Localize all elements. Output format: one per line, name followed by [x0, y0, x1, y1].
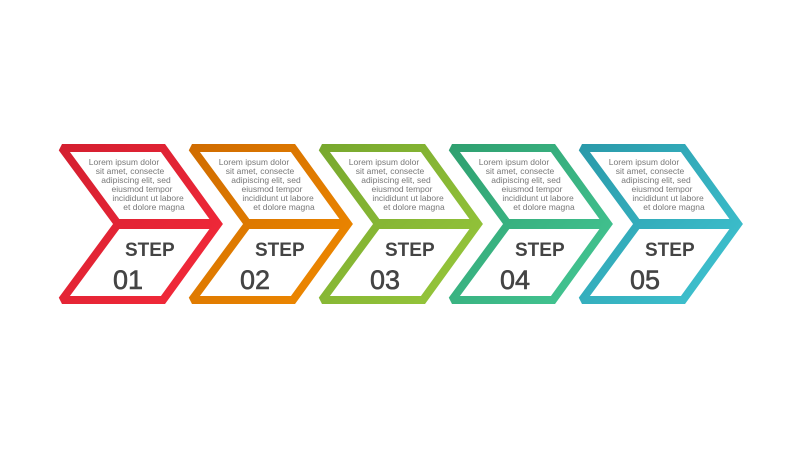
- chevron outline: [582, 148, 738, 300]
- description text: eiusmod tempor: [242, 184, 303, 194]
- step number: 04: [500, 265, 530, 295]
- description text: adipiscing elit, sed: [621, 175, 691, 185]
- description text: Lorem ipsum dolor: [89, 157, 159, 167]
- description text: sit amet, consecte: [486, 166, 555, 176]
- description text: [479, 157, 575, 212]
- description text: sit amet, consecte: [96, 166, 165, 176]
- description text: et dolore magna: [383, 202, 445, 212]
- description text: adipiscing elit, sed: [361, 175, 431, 185]
- description text: incididunt ut labore: [112, 193, 184, 203]
- description text: Lorem ipsum dolor: [479, 157, 549, 167]
- description text: et dolore magna: [253, 202, 315, 212]
- step number: 02: [240, 265, 270, 295]
- chevron outline: [192, 148, 348, 300]
- description text: adipiscing elit, sed: [101, 175, 171, 185]
- description text: sit amet, consecte: [616, 166, 685, 176]
- description text: incididunt ut labore: [372, 193, 444, 203]
- description text: adipiscing elit, sed: [491, 175, 561, 185]
- description text: [349, 157, 445, 212]
- description text: et dolore magna: [643, 202, 705, 212]
- description text: eiusmod tempor: [632, 184, 693, 194]
- description text: eiusmod tempor: [372, 184, 433, 194]
- description text: Lorem ipsum dolor: [219, 157, 289, 167]
- step label: STEP: [255, 240, 305, 261]
- description text: Lorem ipsum dolor: [609, 157, 679, 167]
- step label: STEP: [515, 240, 565, 261]
- step label: STEP: [385, 240, 435, 261]
- description text: et dolore magna: [123, 202, 185, 212]
- description text: et dolore magna: [513, 202, 575, 212]
- chevron outline: [322, 148, 478, 300]
- description text: eiusmod tempor: [112, 184, 173, 194]
- step 1: [62, 148, 218, 300]
- description text: [609, 157, 705, 212]
- description text: [89, 157, 185, 212]
- description text: sit amet, consecte: [356, 166, 425, 176]
- description text: incididunt ut labore: [242, 193, 314, 203]
- description text: Lorem ipsum dolor: [349, 157, 419, 167]
- step label: STEP: [125, 240, 175, 261]
- step number: 05: [630, 265, 660, 295]
- description text: incididunt ut labore: [632, 193, 704, 203]
- description text: eiusmod tempor: [502, 184, 563, 194]
- chevron outline: [62, 148, 218, 300]
- step number: 01: [113, 265, 143, 295]
- chevron outline: [452, 148, 608, 300]
- step number: 03: [370, 265, 400, 295]
- step 2: [192, 148, 348, 300]
- step 3: [322, 148, 478, 300]
- description text: adipiscing elit, sed: [231, 175, 301, 185]
- step 5: [582, 148, 738, 300]
- description text: sit amet, consecte: [226, 166, 295, 176]
- step 4: [452, 148, 608, 300]
- description text: [219, 157, 315, 212]
- step label: STEP: [645, 240, 695, 261]
- description text: incididunt ut labore: [502, 193, 574, 203]
